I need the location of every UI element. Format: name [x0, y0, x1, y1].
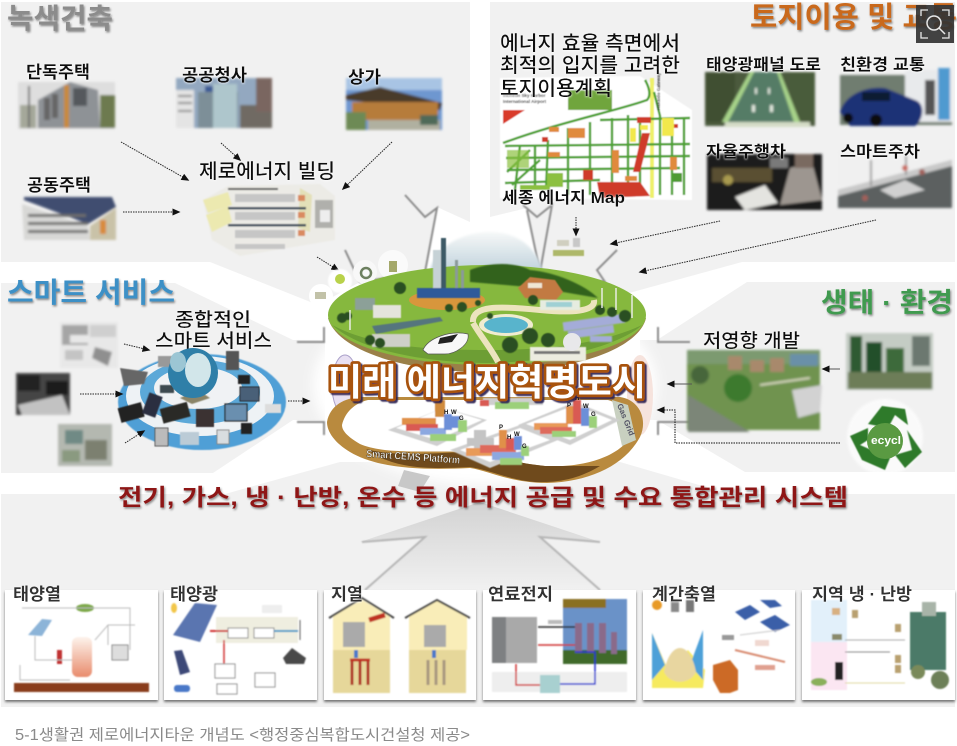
- district blocks: [388, 398, 620, 468]
- green land: [328, 265, 646, 365]
- label: district heating and cooling: 지역 냉 · 난방: [812, 585, 912, 604]
- map: Sejong energy map: International Airport: [503, 99, 547, 104]
- map: Sejong energy map: [500, 72, 692, 200]
- photo: forest park: [846, 333, 933, 390]
- label: apartment: 공동주택: [27, 176, 91, 195]
- labels: H W G markers: H: [575, 396, 579, 402]
- text: comprehensive smart service: 종합적인: [175, 309, 251, 331]
- label: geothermal: 지열: [331, 585, 363, 604]
- photo: smart parking: [838, 150, 952, 208]
- lower platform: [327, 397, 643, 492]
- photo: apartment: [22, 197, 116, 240]
- labels: H W G markers: P: [499, 425, 503, 431]
- solar field: [563, 314, 625, 342]
- caption: 5-1생활권 제로에너지타운 개념도 <행정중심복합도시건설청 제공>: [15, 726, 470, 744]
- label: smart parking: 스마트주차: [840, 143, 920, 161]
- wind turbines: [350, 288, 632, 330]
- label: eco transport: 친환경 교통: [840, 56, 925, 74]
- labels: H W G markers: W: [451, 410, 457, 416]
- hills: [470, 264, 598, 298]
- photo: self-driving car: [707, 154, 822, 210]
- map: Sejong energy map: Hakaido Gateway: [656, 72, 661, 110]
- icon: trash bin: [389, 261, 397, 272]
- photo: eco car: [840, 68, 952, 126]
- illustration: future city: [327, 232, 653, 492]
- buildings: [355, 277, 586, 361]
- arrow: bottom up arrow to center: [360, 502, 600, 590]
- labels: H W G markers: W: [514, 432, 520, 438]
- text: land use planning: 에너지 효율 측면에서: [500, 32, 680, 55]
- label: fuel cell: 연료전지: [488, 585, 553, 604]
- icon: small building: [315, 292, 326, 299]
- map: Sejong energy map: Incheon Sky Harbor: [503, 93, 546, 98]
- label: photovoltaic: 태양광: [170, 585, 218, 604]
- label: gas grid: Gas Grid: [615, 402, 636, 437]
- labels: H W G markers: H: [507, 435, 511, 441]
- lawn shading: [332, 325, 642, 363]
- road: [473, 300, 594, 362]
- title: future energy revolution city: 미래 에너지혁명도시: [328, 362, 646, 403]
- label: low impact development: 저영향 개발: [703, 330, 800, 352]
- recycle label: ecycl: [871, 435, 901, 447]
- upper platform side: [328, 318, 646, 372]
- side grid rings: [332, 355, 653, 435]
- label: public office: 공공청사: [182, 66, 247, 85]
- card: seasonal storage: [643, 585, 795, 700]
- label: solar panel road: 태양광패널 도로: [706, 56, 821, 74]
- label: self-driving car: 자율주행차: [706, 142, 786, 161]
- arrows: into center from land use: [576, 217, 876, 272]
- text: land use planning: [500, 32, 680, 100]
- heading: integrated energy management: 전기, 가스, 냉 · 난방, 온수 등 에너지 공급 및 수요 통합관리 시스템: [118, 484, 848, 510]
- image: zero energy building cutaway: [203, 184, 335, 256]
- heading: ecology environment: 생태 · 환경: [821, 288, 953, 318]
- diagram: smart service rings: [118, 348, 286, 450]
- trees: [337, 282, 631, 353]
- labels: H W G markers: W: [583, 404, 589, 410]
- photo: public office: [176, 78, 272, 128]
- label: commercial: 상가: [348, 68, 381, 87]
- label: detached house: 단독주택: [26, 63, 90, 82]
- card: district heating and cooling: [802, 585, 955, 700]
- text: comprehensive smart service: 스마트 서비스: [155, 330, 272, 352]
- icon: recycle: [847, 399, 923, 475]
- electric car: [423, 333, 468, 354]
- labels: H W G markers: G: [459, 416, 464, 422]
- icon: recycle: [361, 268, 371, 278]
- panel: smart service: [1, 283, 325, 473]
- arrows: into zero energy building: [121, 142, 392, 270]
- photo: commercial building: [346, 78, 442, 130]
- arrows: into smart service: [80, 344, 309, 443]
- heading: smart service: 스마트 서비스: [7, 277, 175, 308]
- labels: H W G markers: G: [591, 412, 596, 418]
- plant ground: [409, 290, 485, 310]
- photo: solar panel road: [705, 72, 815, 127]
- icon: globe: [168, 348, 218, 398]
- photo: low impact development: [687, 350, 822, 432]
- heading: land use and transport: 토지이용 및 교통: [750, 1, 957, 34]
- pond: [479, 314, 533, 336]
- text: land use planning: 토지이용계획: [500, 77, 612, 100]
- photo: smart thumbnails: [16, 322, 118, 466]
- dome: [563, 333, 581, 351]
- label: zero energy building: 제로에너지 빌딩: [199, 160, 335, 183]
- labels: H W G markers: G: [522, 444, 527, 450]
- card: geothermal: [324, 585, 476, 700]
- text: land use planning: 최적의 입지를 고려한: [500, 54, 680, 77]
- icon: small map thumbnail: [553, 238, 584, 256]
- panel: energy systems: [1, 462, 955, 707]
- icons: small round badges: [309, 250, 408, 308]
- icon: bulb: [335, 274, 345, 284]
- label: solar thermal: 태양열: [13, 585, 61, 604]
- label: seasonal storage: 계간축열: [652, 585, 716, 604]
- sky: [430, 232, 545, 280]
- label: platform: Smart CEMS Platform: [366, 448, 460, 467]
- panel: green building: [1, 2, 470, 305]
- panel: ecology: [640, 282, 955, 472]
- heading: green building: 녹색건축: [7, 3, 113, 34]
- labels: H W G markers: P: [567, 403, 571, 409]
- panel: land use and transport: [490, 2, 955, 295]
- tower: [417, 238, 480, 298]
- card: fuel cell: [483, 585, 636, 700]
- center white glow: [313, 285, 657, 485]
- icon: magnifier overlay: [916, 5, 954, 43]
- labels: H W G markers: H: [444, 410, 448, 416]
- photo: detached house: [18, 82, 115, 129]
- card: photovoltaic: [164, 585, 317, 700]
- arrow edges around center: [297, 195, 690, 435]
- label: Sejong energy map: 세종 에너지 Map: [502, 189, 625, 207]
- arrows: into center from ecology: [658, 369, 840, 443]
- text: comprehensive smart service: [155, 309, 272, 352]
- labels: H W G markers: [444, 396, 596, 450]
- card: solar thermal: [5, 585, 158, 700]
